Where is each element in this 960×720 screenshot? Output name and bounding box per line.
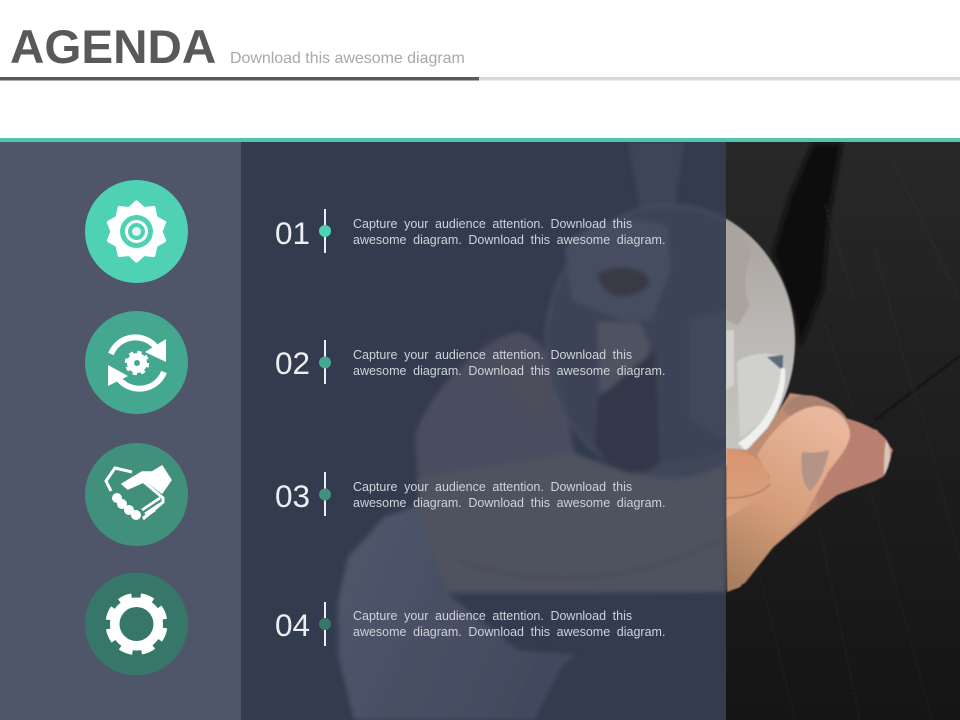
header rule <box>0 77 960 80</box>
panel: left sidebar <box>0 142 241 720</box>
icon: handshake <box>85 443 188 546</box>
agenda item 04: Capture your audience attention. Download this <box>353 609 632 623</box>
finger: top knuckle behind <box>783 395 850 425</box>
agenda item 04: 04 <box>275 607 310 643</box>
glass globe, muted <box>548 207 726 477</box>
photo: hand holding glass globe on dark suit <box>726 142 960 720</box>
thumb tip <box>726 448 769 518</box>
hand silhouette <box>726 393 893 592</box>
agenda item 03: Capture your audience attention. Download this <box>353 480 632 494</box>
palm <box>417 450 726 593</box>
agenda item 02: awesome diagram. Download this awesome diagram. <box>353 364 665 378</box>
subtitle: Download this awesome diagram <box>230 50 465 67</box>
fingernail <box>801 450 829 491</box>
agenda item 01: Capture your audience attention. Download this <box>353 217 632 231</box>
thumb <box>415 332 575 480</box>
agenda item 02: Capture your audience attention. Download this <box>353 348 632 362</box>
icon: refresh arrows with gear <box>85 311 188 414</box>
finger: main index <box>726 406 850 592</box>
agenda item 04: awesome diagram. Download this awesome diagram. <box>353 625 665 639</box>
glass globe, visible part <box>545 204 795 480</box>
teal rule <box>0 138 960 142</box>
agenda item 02 <box>275 340 665 384</box>
agenda item 03: 03 <box>275 478 310 514</box>
agenda item 03: awesome diagram. Download this awesome diagram. <box>353 496 665 510</box>
icon: target gear <box>85 180 188 283</box>
agenda item 01: 01 <box>275 215 310 251</box>
panel: translucent content overlay with muted photo <box>241 142 726 720</box>
finger: back finger with nail <box>815 418 891 508</box>
agenda item 01: awesome diagram. Download this awesome diagram. <box>353 233 665 247</box>
agenda item 01 <box>275 209 665 253</box>
agenda item 04 <box>275 602 665 646</box>
agenda item 03 <box>275 472 665 516</box>
shirt cuff <box>338 505 575 720</box>
agenda item 02: 02 <box>275 345 310 381</box>
title: AGENDA <box>10 21 216 74</box>
icon: gear <box>85 572 188 676</box>
